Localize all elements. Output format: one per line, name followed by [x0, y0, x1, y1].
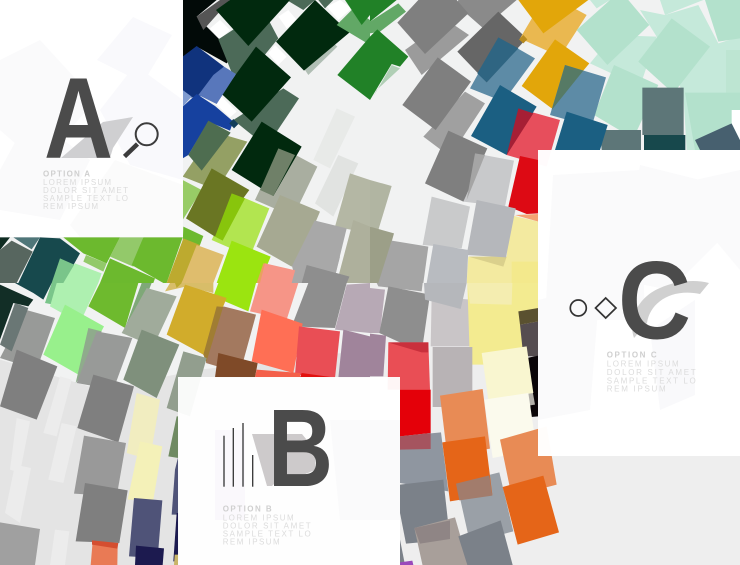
- option C text: SAMPLE TEXT LO: [607, 376, 696, 385]
- panel: option B: [178, 377, 400, 565]
- option B text: SAMPLE TEXT LO: [223, 530, 311, 539]
- option C text: LOREM IPSUM: [607, 360, 679, 369]
- option A text: OPTION A: [43, 169, 90, 178]
- letter C: C: [618, 240, 691, 362]
- option A shadow: [61, 117, 133, 158]
- option C text: DOLOR SIT AMET: [607, 368, 696, 377]
- panel: option A: [0, 0, 183, 237]
- icon: circle: [570, 300, 586, 316]
- option B text: LOREM IPSUM: [223, 513, 294, 522]
- mosaic tiles: top right: [370, 0, 740, 283]
- option B text: OPTION B: [223, 505, 272, 514]
- option B text: REM IPSUM: [223, 538, 280, 547]
- option B text: DOLOR SIT AMET: [223, 522, 311, 531]
- option C text: REM IPSUM: [607, 385, 666, 394]
- mosaic tiles: top left: [0, 0, 370, 283]
- mosaic tiles: bottom right: [370, 283, 559, 565]
- option A text: LOREM IPSUM: [43, 178, 111, 187]
- letter A: A: [44, 55, 113, 183]
- icon: bars: [224, 423, 253, 487]
- option A text: SAMPLE TEXT LO: [43, 194, 128, 203]
- option A text: [43, 169, 128, 211]
- option A text: DOLOR SIT AMET: [43, 186, 128, 195]
- mosaic tiles: bottom left: [0, 283, 370, 565]
- option C text: OPTION C: [607, 351, 657, 360]
- panel: option C: [538, 150, 740, 456]
- option C text: [607, 351, 696, 394]
- option B shadow: [252, 434, 315, 486]
- option B text: [223, 505, 311, 547]
- option A text: REM IPSUM: [43, 202, 98, 211]
- letter B: B: [268, 387, 333, 510]
- icon: diamond: [596, 298, 616, 318]
- option C shadow: [632, 281, 709, 338]
- icon: magnifying glass: [124, 123, 158, 156]
